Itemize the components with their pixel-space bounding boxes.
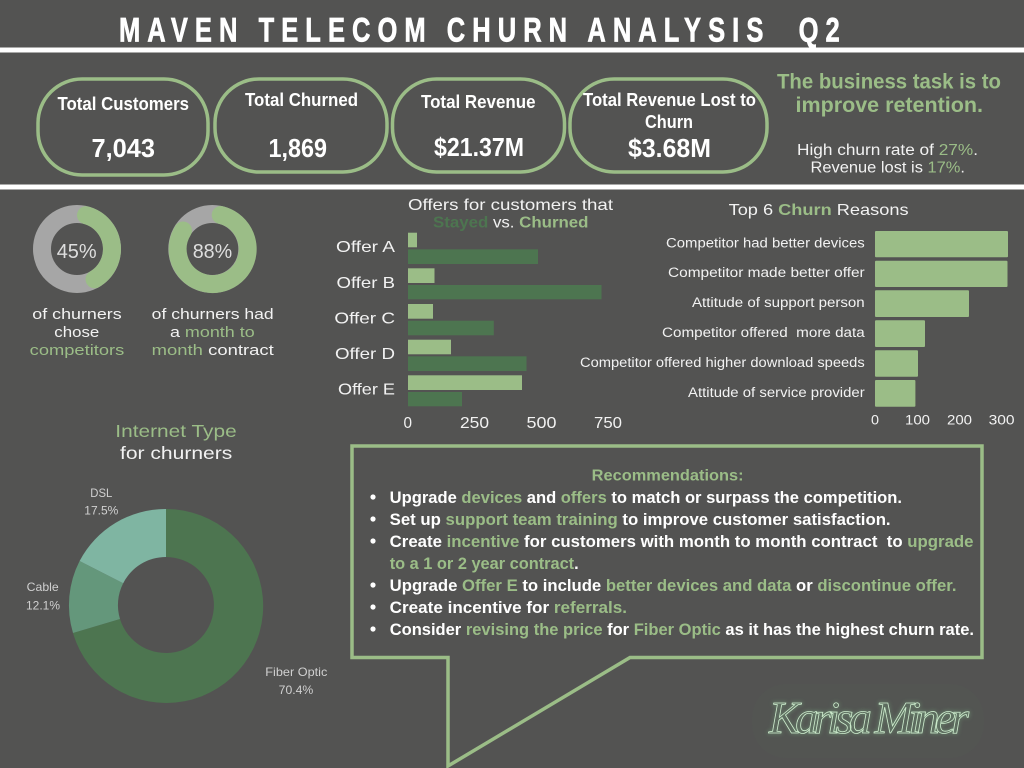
reason labels — [580, 235, 865, 400]
heading: internet type: Internet Type — [115, 421, 237, 441]
offer labels: Offer A — [336, 239, 395, 256]
recommendations heading: Recommendations: — [592, 468, 744, 485]
KPI card: total churned — [215, 79, 387, 172]
bar chart: offers stayed vs churned — [334, 197, 622, 432]
offer axis: 0 — [404, 415, 412, 432]
offer axis — [404, 415, 622, 432]
chart title — [408, 197, 614, 232]
reason axis: 300 — [989, 412, 1015, 428]
offer labels — [334, 239, 395, 399]
donut: 45% chose competitors: 45% — [57, 241, 97, 263]
chart title: Stayed vs. Churned — [433, 215, 588, 232]
KPI card: revenue lost to churn — [570, 79, 767, 172]
panel: KPI cards — [38, 79, 767, 175]
recommendation list: Upgrade Offer E to include better devices and data or discontinue offer. — [390, 577, 956, 595]
recommendation list: to a 1 or 2 year contract. — [390, 555, 579, 573]
recommendation list: Consider revising the price for Fiber Optic as it has the highest churn rate. — [390, 621, 974, 639]
recommendation list — [390, 489, 974, 639]
business task text block: High churn rate of 27%. — [797, 142, 978, 159]
KPI card: total churned: 1,869 — [268, 133, 327, 163]
donut: 88% month to month contract: of churners had — [152, 307, 274, 323]
label: DSL: DSL — [90, 486, 113, 500]
offer bars — [408, 233, 602, 406]
segment: cable — [69, 561, 123, 633]
reason bars — [875, 231, 1008, 407]
reason axis: 0 — [871, 412, 879, 428]
KPI card: total customers: 7,043 — [92, 133, 155, 163]
offer axis: 750 — [594, 415, 622, 432]
recommendation list: Upgrade devices and offers to match or surpass the competition. — [390, 489, 902, 507]
label: fiber optic: 70.4% — [279, 683, 314, 697]
callout: recommendations — [352, 446, 982, 766]
offer labels: Offer C — [334, 311, 395, 328]
donut: 88% month to month contract: month contract — [152, 343, 274, 359]
donut: 88% month to month contract: a month to — [170, 325, 255, 341]
reason labels: Competitor had better devices — [666, 235, 865, 250]
business task text block: The business task is to — [777, 71, 1001, 94]
KPI card: total churned: Total Churned — [245, 90, 358, 110]
reason labels: Attitude of service provider — [688, 385, 865, 400]
KPI card: total revenue: Total Revenue — [421, 92, 536, 112]
KPI card: total customers — [38, 79, 208, 175]
label: cable: 12.1% — [26, 598, 60, 612]
chart title: Offers for customers that — [408, 197, 614, 214]
segment: DSL — [80, 509, 166, 583]
label: DSL: 17.5% — [84, 503, 119, 517]
business task text block: improve retention. — [796, 94, 983, 117]
signature — [752, 684, 984, 758]
business task text block: Revenue lost is 17%. — [810, 160, 965, 177]
KPI card: total customers: Total Customers — [58, 94, 189, 114]
heading: internet type: for churners — [120, 443, 233, 463]
KPI card: revenue lost to churn: Total Revenue Lost to — [583, 90, 756, 110]
offer axis: 250 — [460, 415, 489, 432]
offer labels: Offer D — [335, 346, 395, 363]
donut: 45% chose competitors: competitors — [30, 343, 124, 359]
donut: 45% chose competitors: chose — [54, 325, 99, 341]
KPI card: total revenue — [392, 79, 564, 172]
bullet markers — [370, 494, 376, 632]
heading: internet type — [115, 421, 237, 463]
donut: 45% chose competitors: of churners — [32, 307, 122, 323]
KPI card: revenue lost to churn: Churn — [645, 112, 693, 132]
label: fiber optic: Fiber Optic — [265, 665, 327, 679]
reason axis: 200 — [947, 412, 972, 428]
donut: 45% chose competitors — [30, 214, 124, 359]
recommendation list: Set up support team training to improve customer satisfaction. — [390, 511, 891, 529]
reason labels: Competitor offered higher download speeds — [580, 355, 865, 370]
label: DSL — [84, 486, 119, 517]
label: cable: Cable — [27, 580, 59, 594]
recommendation list: Create incentive for customers with month to month contract to upgrade — [390, 533, 974, 551]
label: fiber optic — [265, 665, 327, 697]
KPI card: revenue lost to churn: $3.68M — [628, 133, 711, 163]
signature: Karisa Miner — [768, 692, 970, 743]
reason labels: Attitude of support person — [692, 295, 865, 310]
business task text block — [777, 71, 1001, 177]
donut: 88% month to month contract — [152, 214, 274, 359]
donut: 88% month to month contract: 88% — [193, 241, 232, 263]
bar chart: top 6 churn reasons — [580, 202, 1015, 428]
reason labels: Competitor offered more data — [662, 325, 865, 340]
offer labels: Offer E — [338, 382, 395, 399]
label: cable — [26, 580, 60, 612]
segment: fiber optic — [73, 509, 263, 703]
KPI card: total revenue: $21.37M — [434, 132, 524, 162]
reason axis — [871, 412, 1015, 428]
reason labels: Competitor made better offer — [668, 265, 865, 280]
recommendation list: Create incentive for referrals. — [390, 599, 627, 617]
speech bubble outline — [352, 446, 982, 766]
offer axis: 500 — [526, 415, 557, 432]
donut chart: internet type — [26, 486, 327, 703]
reason axis: 100 — [905, 412, 930, 428]
chart title: Top 6 Churn Reasons — [729, 202, 909, 219]
title: MAVEN TELECOM CHURN ANALYSIS Q2 — [119, 12, 840, 49]
offer labels: Offer B — [336, 275, 395, 292]
